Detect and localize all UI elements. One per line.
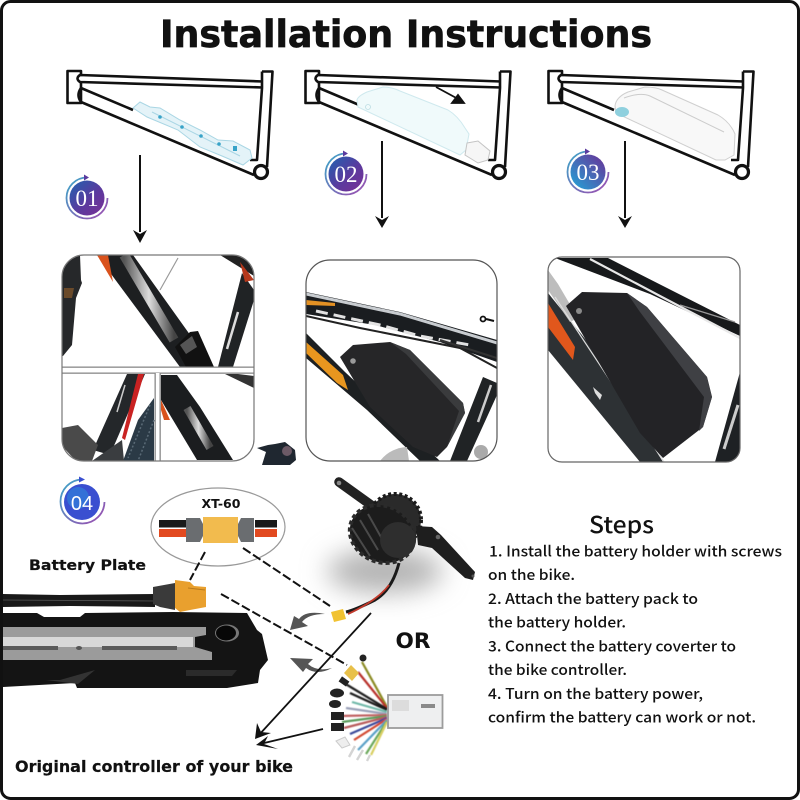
text block: steps list <box>488 540 782 728</box>
badge 01: 01 <box>76 186 98 211</box>
arrow: controller plug to battery plate <box>290 658 332 672</box>
small bike photo fragment <box>257 442 296 465</box>
battery plate with cable and XT-60 plug <box>3 580 268 688</box>
motor barrel with fins <box>340 495 424 573</box>
holder end <box>465 141 490 163</box>
callout: XT-60 connector <box>151 488 285 566</box>
text block: steps list: confirm the battery can work or not. <box>488 706 756 728</box>
dividers <box>62 367 254 373</box>
left crank <box>339 482 371 505</box>
diagram: step 3 frame with battery installed <box>548 71 754 178</box>
text block: steps list: on the bike. <box>488 564 575 585</box>
top tube <box>306 292 497 362</box>
text block: steps list: 4. Turn on the battery power, <box>488 683 703 704</box>
connector block <box>175 331 214 367</box>
diagram: step 2 frame with battery sliding in <box>306 71 510 178</box>
small insertion arrow <box>436 87 464 103</box>
seat tube <box>450 377 497 461</box>
arrow: step 2 down <box>375 141 389 228</box>
badge 02: 02 <box>334 162 358 187</box>
arrow: controller to original controller <box>256 729 323 749</box>
battery holder outline <box>133 102 252 165</box>
wire bundle <box>340 662 387 755</box>
dashed connection lines <box>190 548 347 665</box>
chainring <box>369 494 421 546</box>
motor cable <box>346 563 399 612</box>
plate body <box>3 612 268 688</box>
label: OR: OR <box>396 629 431 654</box>
text block: steps list: the battery holder. <box>488 612 626 632</box>
down tube <box>548 293 663 462</box>
badge 03: 03 <box>576 160 600 185</box>
label: original controller: Original controller of your bike <box>15 757 293 776</box>
label: XT-60: XT-60 <box>202 496 241 511</box>
arrow: step 1 down <box>133 155 147 243</box>
left fork <box>62 255 82 356</box>
controller box <box>388 695 442 728</box>
cable <box>3 594 155 607</box>
installed battery outline <box>615 87 735 160</box>
heading: Steps: Steps <box>589 506 654 540</box>
main down tube <box>98 256 189 366</box>
mid-drive motor <box>327 481 475 622</box>
top right tube <box>220 255 254 276</box>
label: Battery Plate: Battery Plate <box>29 558 146 574</box>
arrow: motor to original controller <box>255 613 371 739</box>
connector pair <box>159 517 277 543</box>
title: Installation Instructions <box>160 13 652 56</box>
top tube <box>555 258 740 336</box>
bottom left: tire <box>123 398 154 461</box>
bottom right: battery mount <box>161 375 233 460</box>
shadow <box>327 549 443 593</box>
down tube <box>306 333 440 461</box>
panel: step 3 battery photo <box>548 257 740 462</box>
battery <box>566 292 712 458</box>
badge 04 <box>61 476 104 523</box>
plug ends <box>329 654 366 731</box>
right crank <box>416 526 475 580</box>
badge 02 <box>325 150 366 194</box>
text block: steps list: 2. Attach the battery pack to <box>488 588 698 609</box>
text block: steps list: 3. Connect the battery coverter to <box>488 636 736 656</box>
metal rail <box>3 627 212 660</box>
arrow: step 3 down <box>618 141 632 228</box>
badge 03 <box>568 148 608 192</box>
seat tube <box>715 372 740 462</box>
motor plug <box>331 609 346 622</box>
bottom left: rear frame <box>93 374 145 455</box>
battery <box>340 342 465 457</box>
panel: step 2 battery photo <box>306 260 497 461</box>
seat tube <box>218 273 254 367</box>
mount hole <box>215 624 239 642</box>
badge 01 <box>66 174 108 218</box>
plug <box>153 583 175 610</box>
diagram: step 1 frame with battery holder <box>68 71 272 178</box>
lock highlight <box>615 107 629 117</box>
text block: steps list: 1. Install the battery holder with screws <box>489 540 782 562</box>
text block: steps list: the bike controller. <box>488 659 627 680</box>
yellow plug <box>344 665 359 681</box>
panel: step 1 photo collage <box>62 255 254 463</box>
chainring fragment <box>380 447 409 461</box>
controller with wiring harness <box>329 654 442 761</box>
badge 04: 04 <box>71 493 93 515</box>
battery pack outline <box>357 87 469 155</box>
cables <box>316 311 470 345</box>
motor cover disc <box>380 522 416 558</box>
arrow: motor plug to battery plate <box>290 613 325 630</box>
seat stay line <box>160 258 178 290</box>
